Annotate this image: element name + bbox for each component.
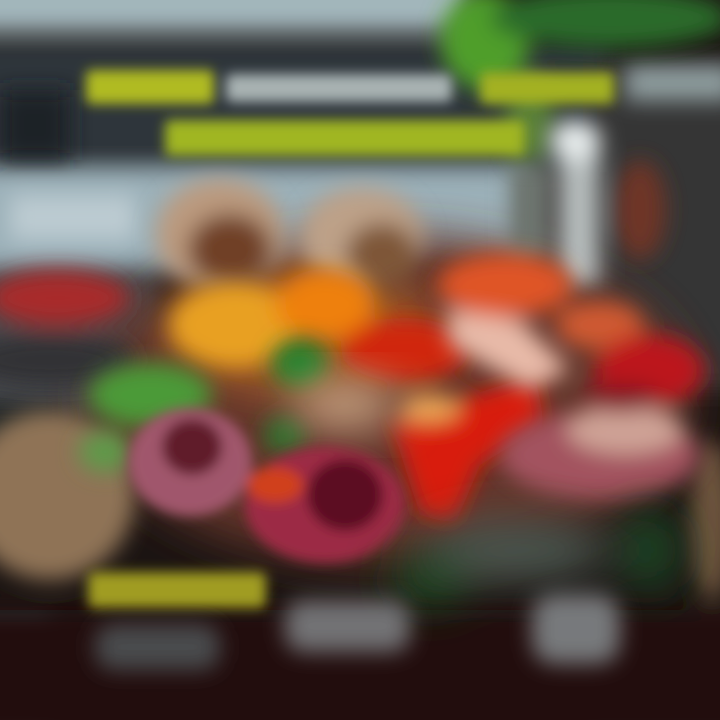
salmon (437, 253, 573, 317)
yellow pepper (169, 283, 301, 367)
title: blurred headline (86, 70, 614, 156)
side bowl with red food (0, 270, 135, 386)
onion right (245, 447, 405, 563)
peppers (169, 269, 545, 525)
onion slices (128, 408, 405, 563)
title line 2 (165, 120, 525, 156)
tuna centre (290, 381, 400, 429)
pale slice (445, 310, 570, 390)
glass and jar at right (510, 120, 666, 285)
caption blob centre (285, 600, 410, 652)
meat slice (500, 411, 700, 499)
orange pepper (275, 269, 375, 341)
basil left (88, 363, 212, 427)
onion left (128, 408, 252, 516)
herbs (79, 340, 328, 472)
wooden plate (0, 410, 720, 720)
red pepper strip (341, 318, 469, 382)
highlighted label (88, 572, 266, 608)
dark greens at bottom right (390, 510, 678, 605)
title line 1 (86, 70, 614, 104)
basil lower (263, 415, 307, 455)
decorative herb leaves at top right (440, 0, 720, 165)
caption blob left (95, 624, 220, 670)
basil centre (272, 340, 328, 388)
caption blob right (532, 594, 620, 664)
pale pepper highlight (400, 394, 460, 422)
footer caption: blurred labels (88, 572, 620, 670)
warm under-layer beneath food (90, 235, 690, 565)
egg left (156, 179, 284, 291)
red pepper lower (390, 375, 545, 525)
red edge (595, 334, 705, 406)
eggs (156, 179, 424, 291)
salmon and meat slices (437, 253, 705, 499)
egg right (300, 188, 424, 288)
